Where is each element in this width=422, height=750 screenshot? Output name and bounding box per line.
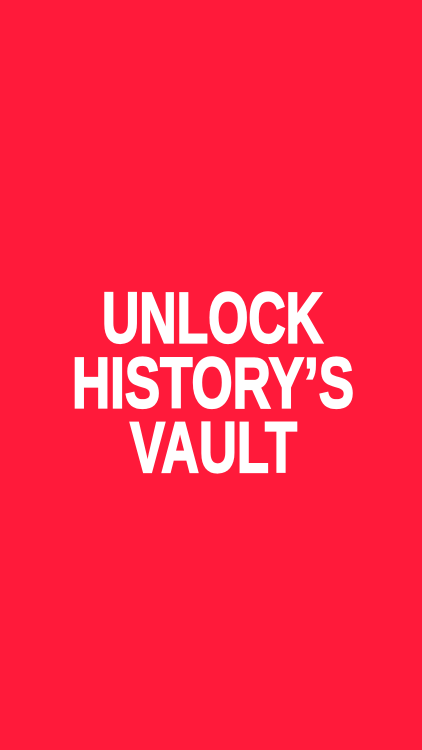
title line: UNLOCK: UNLOCK <box>102 278 323 358</box>
title <box>72 278 354 488</box>
title line: VAULT: VAULT <box>130 408 297 488</box>
